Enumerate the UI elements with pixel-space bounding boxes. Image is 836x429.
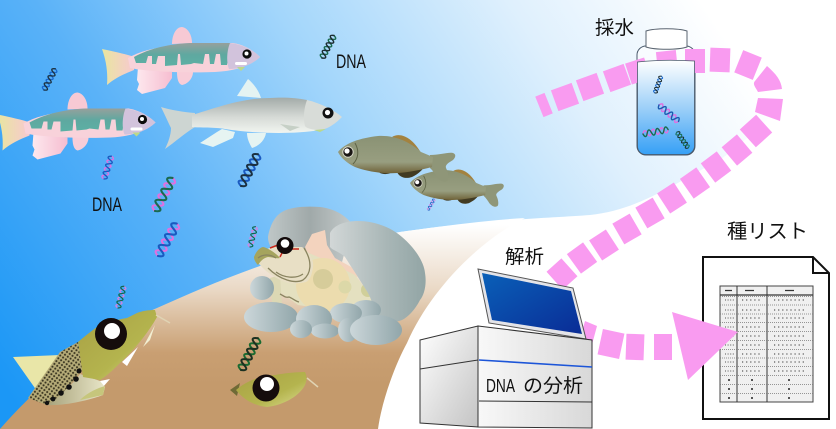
species list document (703, 257, 829, 419)
label: DNA analysis: の分析 (523, 375, 583, 397)
catfish large (13, 310, 170, 405)
label: DNA left: DNA (92, 195, 122, 216)
label: DNA analysis: DNA (486, 376, 515, 396)
analyzer box (420, 326, 592, 428)
belly (47, 374, 105, 405)
arrowhead (672, 312, 738, 380)
label: water sampling: 採水 (595, 17, 634, 39)
tail (13, 355, 60, 391)
catfish small (230, 372, 318, 407)
barbel (156, 315, 170, 323)
lower rocks (244, 276, 402, 345)
right large rock (330, 221, 426, 322)
hiding fish body (254, 237, 377, 312)
species table (720, 286, 813, 402)
minnow left (0, 92, 156, 160)
bottle glass behind dashes (637, 46, 695, 155)
dark fish small (410, 170, 504, 207)
label: species list: 種リスト (727, 220, 808, 243)
DNA in bottle (642, 75, 690, 149)
label: DNA analysis (486, 375, 583, 397)
dashed process arrow (535, 48, 783, 360)
bottle cap (646, 29, 687, 49)
dark fish large (338, 135, 455, 182)
DNA fragments in water (42, 34, 436, 372)
pectoral fin (143, 325, 155, 347)
label: analysis: 解析 (505, 246, 544, 268)
rock group with fish (244, 207, 426, 345)
label: DNA upper: DNA (336, 52, 366, 73)
head and back (78, 310, 157, 380)
lower fin (80, 386, 105, 400)
minnow top (102, 27, 260, 94)
laptop screen (478, 269, 586, 339)
eye (95, 318, 127, 350)
scale patch (28, 342, 82, 405)
upper rock (268, 207, 352, 270)
river bed sand (0, 218, 525, 429)
analyzer with laptop (420, 269, 592, 428)
pink inner (305, 230, 362, 282)
lateral spots (45, 368, 82, 405)
bottle water (638, 60, 694, 154)
silver fish (161, 79, 342, 149)
sample bottle (638, 29, 694, 154)
